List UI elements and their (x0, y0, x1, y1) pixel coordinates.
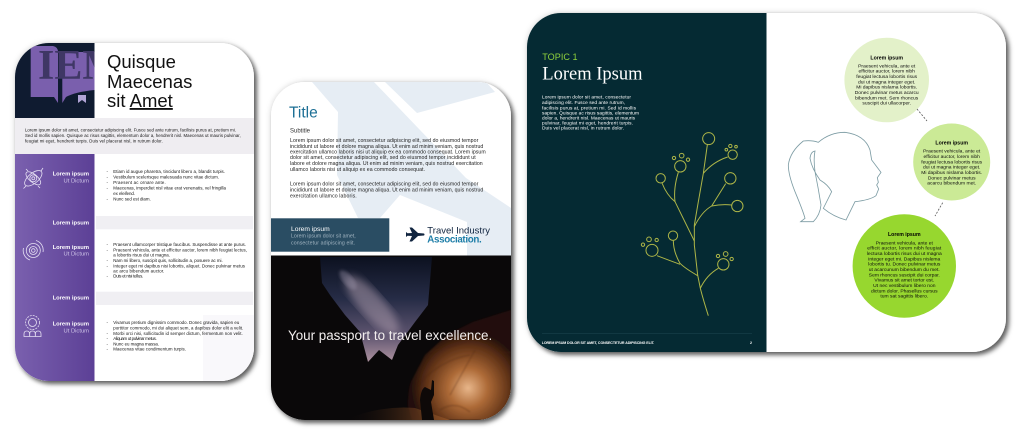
intro paragraph: dolor a, hendrerit nisl. Maecenas ut mauris (542, 115, 636, 121)
body paragraph one: labore et dolore magna aliqua. Ut enim ad minim veniam, quis nostrud exercitation (290, 161, 483, 167)
circle: mid green note: Donec pulvinar metus (928, 175, 976, 181)
circle: bright green note: lectusa lobortis risus dui ut magna (867, 251, 942, 257)
section heading three: Lorem ipsum (53, 296, 89, 302)
body paragraph two: Lorem ipsum dolor sit amet, consectetur adipiscing elit, sed do eiusmod tempor (290, 182, 479, 188)
circle: bright green note: ut acarcunum bibendum du met. (869, 267, 940, 273)
body paragraph one (290, 138, 486, 173)
bullet list two: Praesent vehicula, ante et efficitur auctor, lorem nibh feugiat lectus, (113, 247, 247, 252)
association logo: Association. (427, 235, 482, 246)
circle: pale green note: efficitur auctor, lorem nibh (858, 69, 915, 75)
callout box: Lorem ipsum (291, 226, 330, 233)
body paragraph one: Lorem ipsum dolor sit amet, consectetur adipiscing elit, sed do eiusmod tempor (290, 138, 479, 144)
intro paragraph: Lorem ipsum dolor sit amet, consectetur (542, 95, 631, 101)
icon: botanical branch (641, 133, 743, 316)
topic label: TOPIC 1 (542, 52, 578, 62)
dark left page (527, 13, 766, 352)
panel: travel association card (271, 82, 511, 420)
intro band: feugiat mi eget, hendrerit turpis. Duis vel placerat nisl, in rutrum dolor. (25, 139, 163, 144)
intro band (15, 118, 254, 154)
circle: bright green note: lobortis tu. Donec pulvinar metus (868, 262, 941, 268)
intro band: Lorem ipsum dolor sit amet, consectetur adipiscing elit. Fusce sed ante rutrum, facilisis purus at, pretium mi. (25, 128, 236, 133)
bullet list three: - (106, 331, 108, 336)
body paragraph one: exercitation ullamco laboris nisi ut aliquip ex ea commodo consequat. Lorem ipsum (290, 150, 486, 156)
faint watermark (223, 350, 254, 381)
sidebar label one: Ut Dictum (64, 178, 89, 184)
circle: bright green note: integer eget mi. Dapibus nislema (868, 256, 941, 262)
bullet list one: - (106, 196, 108, 201)
circle: pale green note: dui ut magna integer eget. (858, 79, 915, 85)
bullet list two: - (106, 258, 108, 263)
intro paragraph: Duis vel placerat nisl, in rutrum dolor. (542, 125, 624, 131)
bullet list three: Aliquam ut pulvinar metus. (113, 336, 157, 341)
sidebar label one: Lorem ipsum (53, 172, 89, 178)
bullet list three: Nunc eu magna massa. (113, 341, 159, 346)
bullet list one: - (106, 174, 108, 180)
bullet list three: porttitor commodo, mi dui aliquet sem, a dapibus dolor elit a velit. (113, 325, 243, 330)
body paragraph two: exercitation ullamco laboris. (290, 193, 357, 199)
association logo: Travel Industry (427, 226, 490, 237)
arrow: first to second (917, 109, 927, 121)
bullet list two: - (106, 242, 108, 247)
icon: gears and people (24, 316, 41, 336)
page number: 2 (750, 341, 752, 345)
intro paragraph: adipiscing elit. Fusce sed ante rutrum, (542, 100, 625, 106)
title (107, 51, 192, 111)
bullet list two: a lobortis risus dui ut magna. (113, 253, 170, 258)
section band two (96, 216, 253, 229)
title: Quisque (107, 51, 176, 72)
callout box (271, 218, 389, 252)
bullet list one: - (106, 169, 108, 174)
association logo (406, 226, 490, 246)
circle: pale green note: Donec pulvinar metus acarcu (855, 90, 919, 96)
bullet list two (106, 242, 247, 279)
sidebar label two (53, 245, 89, 258)
section band three (96, 292, 253, 305)
circle: mid green note: efficitur auctor, lorem nibh (923, 154, 980, 160)
title: Maecenas (107, 71, 192, 92)
arrow: second to third (935, 203, 943, 216)
circle: pale green note: Mi dapibus nislama lobortis. (856, 85, 917, 91)
callout box: consectetur adipiscing elit. (291, 240, 355, 246)
circle: pale green note: Praesent vehicula, ante et (858, 63, 916, 69)
circle: bright green note: Lorem ipsum (888, 232, 921, 238)
circle: pale green note: bibendum met. Sem rhoncus (855, 95, 919, 101)
panel: purple document card (15, 43, 255, 382)
icon: airplane (406, 228, 424, 242)
bullet list two: ac arcu bibendum auctor. (113, 269, 164, 274)
bullet list three: Maecenas vitae condimentum turpis. (113, 347, 186, 352)
logo block (15, 43, 94, 118)
bullet list two: - (106, 247, 108, 252)
bullet list two: Praesent ullamcorper tristique faucibus. Suspendisse at ante purus. (113, 242, 246, 247)
intro band: Sed id mollis sapien. Quisque ac risus sagittis, elementum dolor a, hendrerit nisl. Maecenas ut mauris pulvinar, (25, 133, 241, 138)
sidebar label two: Lorem ipsum (53, 245, 89, 251)
sidebar label three (53, 322, 89, 334)
body paragraph one: dolor sit amet, consectetur adipiscing elit, sed do eiusmod tempor incididunt ut (290, 155, 476, 161)
circle: bright green note: dictum dolor. Phasellus cursus (871, 288, 938, 294)
sidebar label one (53, 172, 89, 184)
circle: bright green note: Vivamus sit amet tortor est. (874, 278, 934, 284)
bullet list one: Vestibulum scelerisque malesuada nunc vitae dictum. (113, 174, 219, 180)
tagline: Your passport to travel excellence. (288, 328, 492, 343)
intro paragraph: facilisis purus at, pretium mi. Sed id mollis (542, 105, 637, 111)
logo block: IEM (38, 43, 122, 89)
body paragraph one: ullamco laboris nisi ut aliquip ex ea commodo consequat. (290, 167, 425, 173)
circle: bright green note: Ut nec vestibulum libero non (873, 283, 936, 289)
heading: Lorem Ipsum (542, 65, 643, 85)
bullet list one: Maecenas, imperdiet nisl vitae erat venenatis, vel fringilla (113, 185, 227, 190)
circle: pale green note: Lorem ipsum (870, 56, 903, 62)
bullet list three: Vivamus pretium dignissim commodo. Donec gravida, sapien eu (113, 320, 240, 325)
body paragraph two (290, 182, 483, 199)
intro paragraph: pulvinar, feugiat mi eget, hendrerit turpis. (542, 120, 633, 126)
bullet list one (106, 169, 227, 201)
title: sit Amet (107, 90, 173, 111)
night sky photo (271, 256, 511, 420)
intro paragraph (542, 95, 639, 131)
bullet list one: - (106, 185, 108, 190)
section heading two: Lorem ipsum (53, 221, 89, 227)
intro paragraph: sapien. Quisque ac risus sagittis, elementum (542, 110, 639, 116)
circle: mid green note (913, 124, 990, 200)
icon: target (23, 240, 43, 260)
footer text: LOREM IPSUM DOLOR SIT AMET, CONSECTETUR ADIPISCING ELIT. (542, 341, 655, 345)
bullet list three (106, 320, 243, 352)
panel: dark and white spread (527, 13, 1006, 352)
icon: head profile (788, 132, 881, 222)
circle: mid green note: feugiat lectusa lobortis risus (921, 159, 983, 165)
body paragraph two: incididunt ut labore et dolore magna aliqua. Ut enim ad minim veniam, quis nostrud (290, 187, 483, 193)
bullet list two: Nam mi libero, suscipit quis, sollicitudin a, posuere ac mi. (113, 258, 223, 263)
subtitle: Subtitle (290, 128, 311, 134)
bullet list two: Integer eget mi dapibus nisi lobortis, aliquet. Donec pulvinar metus (113, 263, 246, 268)
title: Title (289, 104, 318, 121)
sidebar label three: Ut Dictum (64, 328, 89, 334)
footer rule (542, 333, 752, 334)
circle: mid green note: Praesent vehicula, ante et (923, 149, 981, 155)
circle: pale green note (844, 38, 929, 122)
icon: rocket (22, 168, 45, 189)
circle: mid green note: dui ut magna integer eget. (923, 165, 980, 171)
bullet list three: - (106, 336, 108, 341)
sidebar label three: Lorem ipsum (53, 322, 89, 328)
bullet list one: ex eleifend. (113, 191, 135, 196)
circle: bright green note: efficit auctor, lorem nibh feugiat (867, 246, 942, 252)
pale background shapes (312, 82, 511, 256)
callout box: Lorem ipsum dolor sit amet, (291, 234, 356, 240)
bullet list two: Duis et nisi tellus. (113, 274, 143, 279)
circle: mid green note: Mi dapibus nislama lobortis. (921, 170, 982, 176)
bullet list three: - (106, 347, 108, 352)
bullet list three: - (106, 320, 108, 325)
bullet list one: Praesent ac ornare ante. (113, 180, 166, 185)
circle: mid green note: Lorem ipsum (935, 140, 968, 146)
bullet list two: - (106, 274, 108, 279)
bullet list three: - (106, 341, 108, 346)
bullet list one: - (106, 180, 108, 185)
bullet list two: - (106, 263, 108, 268)
bullet list three: Morbi orci nisi, sollicitudin id semper dictum, fermentum non velit. (113, 331, 243, 336)
bullet list one: Etiam id augue pharetra, tincidunt libero a, blandit turpis. (113, 169, 225, 174)
circle: bright green note (853, 214, 956, 318)
circle: bright green note: Sem rhoncus suscipit dui corpar. (869, 272, 940, 278)
circle: mid green note: acarcu bibendum met. (927, 181, 976, 187)
circle: pale green note: feugiat lectusa lobortis risus (856, 74, 918, 80)
circle: bright green note: tum sat sagittis libero. (880, 294, 928, 300)
purple sidebar (15, 154, 94, 382)
bullet list one: Nunc sed est diam. (113, 196, 151, 201)
body paragraph one: incididunt ut labore et dolore magna aliqua. Ut enim ad minim veniam, quis nostrud (290, 144, 483, 150)
circle: pale green note: suscipit dui ullacorper. (862, 101, 911, 107)
sidebar label two: Ut Dictum (64, 252, 89, 258)
circle: bright green note: Praesent vehicula, ante et (876, 240, 933, 246)
